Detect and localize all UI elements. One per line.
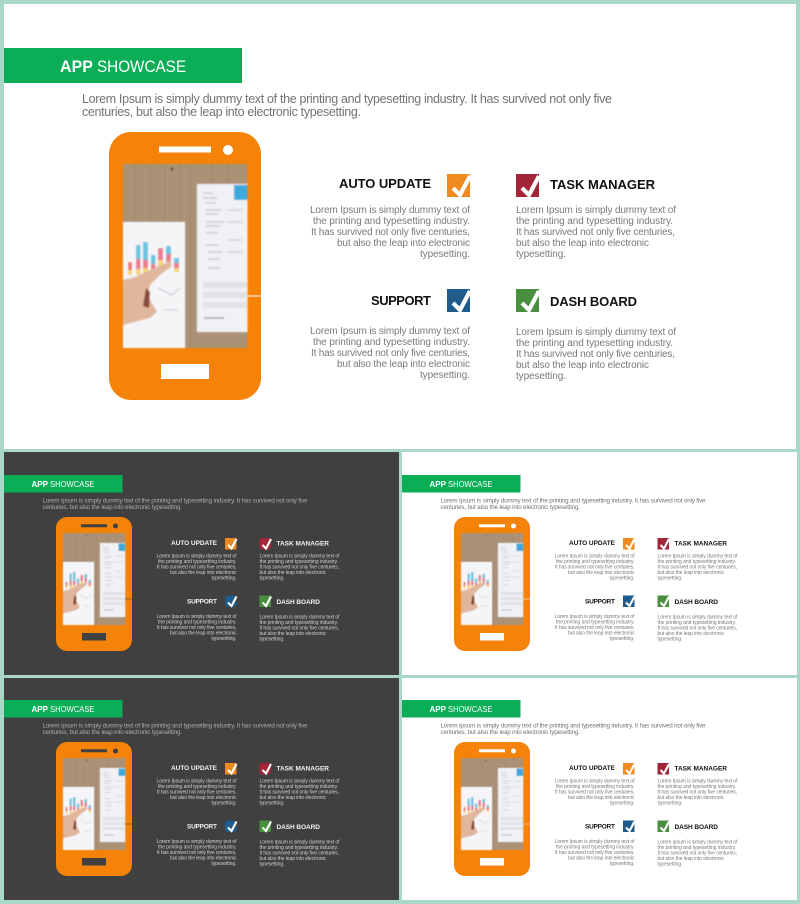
feature: dash board [658,596,738,642]
intro text [440,722,706,736]
feature: auto update: but also the leap into electronic [568,795,635,801]
feature: auto update: It has survived not only five centuries, [157,790,236,796]
intro text: Lorem Ipsum is simply dummy text of the printing and typesetting industry. It has survived not only five [42,722,308,730]
feature: auto update [554,763,635,806]
feature: auto update: Lorem Ipsum is simply dummy text of [156,778,237,784]
feature: dash board: DASH BOARD [674,824,718,831]
feature: dash board: It has survived not only five centuries, [516,349,675,360]
feature: support: It has survived not only five centuries, [555,625,634,631]
feature: auto update: AUTO UPDATE [339,176,431,191]
feature: dash board: the printing and typesetting industry. [658,845,736,851]
feature: support: Lorem Ipsum is simply dummy text of [156,839,237,845]
heading banner [4,475,122,492]
feature: dash board: typesetting. [260,862,284,868]
heading banner: APP [430,479,446,489]
intro text: Lorem Ipsum is simply dummy text of the printing and typesetting industry. It has survived not only five [440,722,706,730]
intro text: centuries, but also the leap into electronic typesetting. [42,504,182,511]
feature: dash board [658,820,738,868]
feature: support: the printing and typesetting industry. [556,844,634,850]
feature: auto update: the printing and typesetting industry. [556,559,634,565]
feature: auto update: the printing and typesetting industry. [313,216,470,227]
feature: dash board: but also the leap into electronic [516,360,649,371]
feature: task manager: TASK MANAGER [674,540,727,548]
feature: support [156,820,237,867]
phone illustration [454,742,530,876]
feature: dash board: but also the leap into electronic [260,856,326,862]
feature: task manager: It has survived not only five centuries, [658,790,737,796]
feature: dash board: the printing and typesetting industry. [516,338,673,349]
feature: auto update [310,174,470,260]
feature: task manager: Lorem Ipsum is simply dummy text of [658,778,738,784]
feature: support: It has survived not only five centuries, [157,850,236,856]
feature: task manager [658,538,738,582]
feature: auto update: Lorem Ipsum is simply dummy text of [310,205,470,216]
feature: dash board: Lorem Ipsum is simply dummy text of [658,614,738,620]
heading banner: APP [430,704,446,714]
feature: task manager: the printing and typesetting industry. [658,784,736,790]
feature: dash board: typesetting. [658,636,682,642]
feature: support: typesetting. [610,861,634,867]
feature: support: but also the leap into electronic [170,856,237,862]
feature: dash board: Lorem Ipsum is simply dummy text of [260,840,340,846]
feature: auto update: Lorem Ipsum is simply dummy text of [554,554,635,560]
feature: auto update: the printing and typesetting industry. [158,559,236,565]
feature: dash board: DASH BOARD [550,294,637,309]
feature: task manager: but also the leap into electronic [658,795,724,801]
panel: dark slide top left [4,452,399,675]
feature: dash board: the printing and typesetting industry. [658,620,736,626]
heading banner: SHOWCASE [50,479,95,489]
heading banner [4,700,122,718]
feature: support: but also the leap into electronic [568,856,635,862]
feature: support: Lorem Ipsum is simply dummy text of [554,614,635,620]
feature: task manager: but also the leap into electronic [516,238,649,249]
feature: task manager: Lorem Ipsum is simply dummy text of [260,778,340,784]
feature: dash board: typesetting. [516,371,566,382]
feature: support [156,596,237,642]
feature: dash board [516,289,676,382]
feature: auto update: typesetting. [420,249,470,260]
heading banner [402,700,520,718]
feature: auto update: typesetting. [610,576,634,582]
intro text [42,722,308,736]
feature: task manager: Lorem Ipsum is simply dummy text of [260,554,340,560]
feature: support: the printing and typesetting industry. [556,620,634,626]
feature: support: Lorem Ipsum is simply dummy text of [310,326,470,337]
feature: dash board: DASH BOARD [276,599,320,606]
feature: dash board: but also the leap into electronic [658,631,724,637]
phone illustration [56,742,139,876]
heading banner: APP [32,704,48,714]
feature: task manager: It has survived not only five centuries, [658,564,737,570]
feature: support: It has survived not only five centuries, [311,348,470,359]
feature: task manager: typesetting. [658,800,682,806]
feature: auto update: but also the leap into electronic [170,795,237,801]
feature: dash board: but also the leap into electronic [260,631,326,637]
feature: support: the printing and typesetting industry. [158,620,236,626]
feature: auto update: but also the leap into electronic [337,238,470,249]
feature: auto update: the printing and typesetting industry. [556,784,634,790]
feature: dash board: typesetting. [260,636,284,642]
feature: support: It has survived not only five centuries, [157,625,236,631]
feature: task manager [260,538,340,582]
feature: dash board: but also the leap into electronic [658,856,724,862]
feature: support [554,596,635,642]
panel: dark slide bottom left [4,678,399,900]
heading banner: APP [60,57,93,76]
feature: task manager: the printing and typesetting industry. [516,216,673,227]
feature: task manager: TASK MANAGER [674,766,727,772]
feature: auto update: AUTO UPDATE [569,540,616,547]
feature: task manager: but also the leap into electronic [260,795,326,801]
feature: task manager [260,763,340,806]
intro text: centuries, but also the leap into electronic typesetting. [440,504,580,511]
feature: task manager: It has survived not only five centuries, [516,227,675,238]
phone illustration [454,517,530,651]
intro text: centuries, but also the leap into electronic typesetting. [82,105,361,119]
intro text [82,92,612,119]
feature: auto update [156,538,237,582]
feature: auto update: typesetting. [610,800,634,806]
intro text: centuries, but also the leap into electronic typesetting. [440,729,580,736]
intro text: Lorem Ipsum is simply dummy text of the printing and typesetting industry. It has survived not only five [42,498,308,504]
feature: auto update: It has survived not only five centuries, [555,790,634,796]
feature: task manager: TASK MANAGER [550,177,656,192]
intro text: Lorem Ipsum is simply dummy text of the printing and typesetting industry. It has survived not only five [82,92,612,106]
feature: support [310,289,470,381]
panel: white slide top right [402,452,797,675]
heading banner [4,48,242,83]
feature: support: SUPPORT [371,293,431,308]
feature: support: SUPPORT [187,598,217,606]
feature: auto update: AUTO UPDATE [171,540,218,547]
feature: support: SUPPORT [187,824,217,830]
intro text: Lorem Ipsum is simply dummy text of the printing and typesetting industry. It has survived not only five [440,498,706,504]
feature: dash board: It has survived not only five centuries, [658,850,737,856]
feature: dash board: the printing and typesetting industry. [260,845,338,851]
feature: task manager: TASK MANAGER [276,540,329,548]
panel: white slide bottom right [402,678,797,900]
feature: task manager: TASK MANAGER [276,766,329,772]
heading banner: SHOWCASE [448,704,493,714]
feature: support: typesetting. [610,636,634,642]
feature: task manager: Lorem Ipsum is simply dummy text of [516,205,676,216]
heading banner: SHOWCASE [50,704,95,714]
feature: support: but also the leap into electronic [337,359,470,370]
feature: task manager: but also the leap into electronic [658,570,724,576]
panel: large white slide [4,4,796,449]
feature: dash board: Lorem Ipsum is simply dummy text of [260,614,340,620]
feature: task manager [658,763,738,806]
feature: task manager: typesetting. [260,800,284,806]
feature: dash board: It has survived not only five centuries, [260,626,339,632]
feature: task manager: the printing and typesetting industry. [260,559,338,565]
feature: auto update: but also the leap into electronic [170,570,237,576]
feature: support: It has survived not only five centuries, [555,850,634,856]
feature: support: but also the leap into electronic [568,630,635,636]
feature: task manager: the printing and typesetting industry. [658,559,736,565]
feature: auto update [554,538,635,582]
feature: support: typesetting. [420,370,470,381]
feature: auto update: It has survived not only five centuries, [311,227,470,238]
feature: dash board: DASH BOARD [276,824,320,831]
phone illustration [56,517,139,651]
feature: task manager [516,174,676,260]
feature: support: Lorem Ipsum is simply dummy text of [554,839,635,845]
feature: task manager: It has survived not only five centuries, [260,790,339,796]
feature: support: SUPPORT [585,598,615,606]
feature: auto update: Lorem Ipsum is simply dummy text of [554,778,635,784]
feature: task manager: typesetting. [260,576,284,582]
intro text [42,498,308,511]
feature: dash board: It has survived not only five centuries, [658,626,737,632]
feature: dash board [260,596,340,642]
feature: task manager: the printing and typesetting industry. [260,784,338,790]
feature: task manager: It has survived not only five centuries, [260,564,339,570]
feature: auto update: typesetting. [212,800,236,806]
feature: dash board [260,820,340,868]
feature: auto update: It has survived not only five centuries, [555,564,634,570]
feature: dash board: Lorem Ipsum is simply dummy text of [658,840,738,846]
feature: support: typesetting. [212,636,236,642]
feature: dash board: the printing and typesetting industry. [260,620,338,626]
feature: support: the printing and typesetting industry. [313,337,470,348]
feature: task manager: typesetting. [516,249,566,260]
feature: support: but also the leap into electronic [170,630,237,636]
feature: dash board: typesetting. [658,862,682,868]
intro text: centuries, but also the leap into electronic typesetting. [42,729,182,736]
feature: dash board: DASH BOARD [674,599,718,606]
feature: support: the printing and typesetting industry. [158,844,236,850]
intro text [440,498,706,511]
feature: support: Lorem Ipsum is simply dummy text of [156,614,237,620]
feature: support: typesetting. [212,861,236,867]
feature: auto update [156,763,237,806]
feature: auto update: AUTO UPDATE [171,765,218,772]
heading banner [402,475,520,492]
heading banner: SHOWCASE [97,57,186,76]
feature: task manager: Lorem Ipsum is simply dummy text of [658,554,738,560]
feature: auto update: It has survived not only five centuries, [157,564,236,570]
feature: support: SUPPORT [585,824,615,830]
feature: dash board: It has survived not only five centuries, [260,850,339,856]
feature: support [554,820,635,867]
feature: auto update: typesetting. [212,576,236,582]
feature: dash board: Lorem Ipsum is simply dummy text of [516,327,676,338]
heading banner: APP [32,479,48,489]
phone illustration [109,132,261,400]
feature: auto update: AUTO UPDATE [569,765,616,772]
heading banner: SHOWCASE [448,479,493,489]
feature: auto update: the printing and typesetting industry. [158,784,236,790]
feature: auto update: but also the leap into electronic [568,570,635,576]
feature: task manager: but also the leap into electronic [260,570,326,576]
feature: auto update: Lorem Ipsum is simply dummy text of [156,554,237,560]
feature: task manager: typesetting. [658,576,682,582]
